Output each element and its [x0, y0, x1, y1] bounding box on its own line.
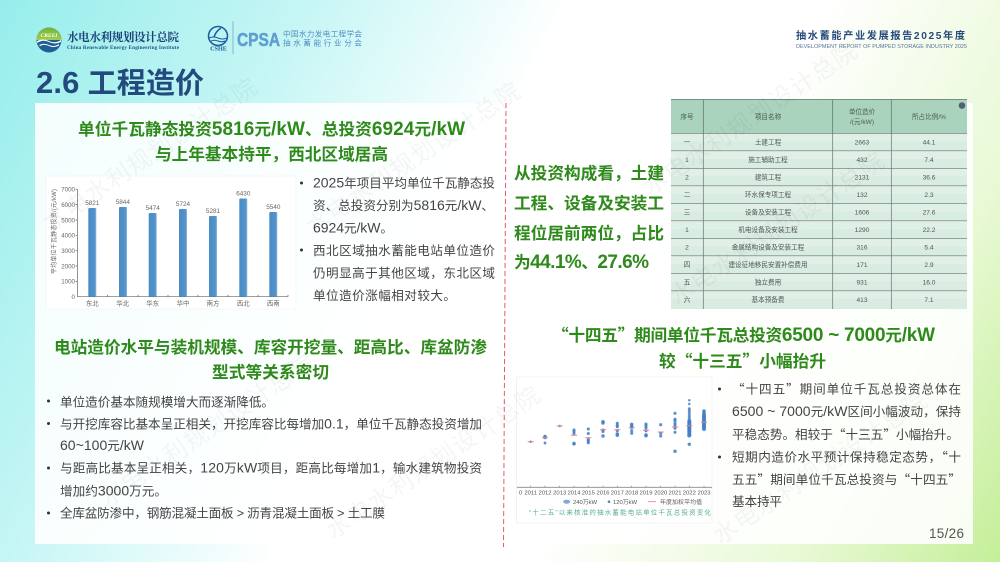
y axis: 7000 — [61, 186, 76, 194]
text block: cost factor bullets: 与距高比基本呈正相关，120万kW项目，距高比每增加1，输水建筑物投资 — [60, 460, 482, 476]
table rows: 2 — [685, 244, 689, 252]
text block: cost factor bullets: 60~100元/kW — [60, 437, 145, 453]
table rows: 机电设备及安装工程 — [738, 225, 798, 234]
table rows: 1606 — [855, 210, 870, 216]
y axis: 4000 — [61, 233, 76, 240]
text block: 14th five-year plan bullets: 基本持平 — [732, 495, 782, 509]
year labels: 2020 — [654, 490, 668, 496]
table rows: 432 — [856, 157, 868, 164]
weighted mean marks — [528, 422, 707, 442]
legend: 年度加权平均值 — [660, 498, 702, 506]
year labels: 2013 — [553, 490, 567, 496]
bar value labels: 5844 — [116, 199, 130, 206]
table rows: 独立费用 — [755, 278, 781, 286]
table rows: 一 — [684, 140, 691, 146]
watermarks: 水电水利规划设计总院 — [708, 387, 932, 550]
bar value labels: 5724 — [176, 201, 191, 208]
icon: CREEI emblem — [36, 27, 62, 52]
text block: cost factor bullets: 单位造价基本随规模增大而逐渐降低。 — [60, 394, 274, 410]
watermarks: 水电水利规划设计总院 — [38, 74, 262, 237]
y axis: 3000 — [61, 248, 76, 255]
table rows: 316 — [856, 244, 868, 252]
table rows: 金属结构设备及安装工程 — [732, 242, 805, 252]
bar value labels: 5281 — [206, 208, 221, 215]
table rows: 三 — [684, 208, 691, 216]
text block: regional cost bullets: 单位造价涨幅相对较大。 — [313, 289, 456, 303]
legend: 240万kW — [573, 499, 597, 506]
icon: CREEI emblem: CREEI — [41, 33, 58, 39]
table header text: 所占比例/% — [912, 112, 946, 121]
table rows: 1 — [685, 157, 689, 164]
report title English: DEVELOPMENT REPORT OF PUMPED STORAGE INDUSTRY 2025 — [796, 44, 967, 50]
y axis: 1000 — [61, 279, 76, 286]
heading: unit static investment: 与上年基本持平，西北区域居高 — [155, 144, 388, 164]
table rows: 7.4 — [924, 157, 934, 164]
table rows: 1 — [685, 227, 689, 234]
y axis: 5000 — [61, 217, 76, 224]
bar value labels: 5474 — [146, 205, 160, 212]
y axis: 0 — [72, 294, 76, 301]
text block: regional cost bullets: 西北区域抽水蓄能电站单位造价 — [313, 244, 495, 258]
table rows: 1290 — [855, 227, 870, 234]
callout: investment composition: 为44.1%、27.6% — [514, 252, 649, 273]
text block: regional cost bullets — [300, 174, 495, 303]
CPSA wordmark: CPSA — [237, 29, 280, 50]
table rows: 五 — [684, 278, 691, 286]
text block: regional cost bullets: 资、总投资分别为5816元/kW、 — [313, 197, 494, 213]
year labels: 2012 — [538, 490, 552, 496]
year labels: 2021 — [668, 490, 682, 496]
text block: regional cost bullets: 仍明显高于其他区域，东北区域 — [313, 266, 495, 280]
table header text — [680, 107, 946, 126]
table rows: 建设征地移民安置补偿费用 — [728, 260, 808, 269]
heading: 14th five-year plan investment: 较“十三五”小幅抬升 — [659, 348, 826, 372]
heading: unit static investment — [78, 119, 465, 164]
bar chart: regional unit cost — [46, 176, 296, 309]
page number: 15/26 — [929, 526, 964, 541]
bar value labels: 5540 — [266, 204, 281, 211]
bar value labels: 6430 — [236, 190, 251, 198]
text block: 14th five-year plan bullets — [718, 378, 961, 509]
y axis — [61, 186, 288, 301]
watermarks: 水电水利规划设计总院 — [95, 350, 319, 513]
table header text: /(元/kW) — [850, 118, 874, 126]
watermarks: 水电水利规划设计总院 — [301, 78, 525, 241]
category labels: 西南 — [267, 298, 280, 308]
callout: investment composition — [514, 163, 664, 273]
table: investment composition — [671, 99, 967, 309]
table rows: 四 — [684, 261, 690, 269]
category labels — [86, 298, 280, 308]
report title Chinese: 抽水蓄能产业发展报告2025年度 — [796, 29, 965, 42]
table rows: 设备及安装工程 — [745, 208, 791, 216]
callout: investment composition: 从投资构成看，土建 — [514, 163, 664, 183]
table rows: 2663 — [855, 140, 870, 146]
table rows: 基本预备费 — [752, 295, 785, 304]
year labels: 2016 — [596, 490, 610, 496]
heading: 14th five-year plan investment — [552, 322, 935, 372]
table rows: 施工辅助工程 — [748, 155, 788, 164]
text block: cost factor bullets: 全库盆防渗中，钢筋混凝土面板 > 沥青混凝土面板 > 土工膜 — [60, 506, 385, 520]
year labels: 2019 — [639, 490, 653, 496]
table header text: 项目名称 — [755, 112, 782, 121]
table rows: 22.2 — [923, 227, 936, 234]
year labels: 2018 — [625, 490, 639, 496]
text block: cost factor bullets: 与开挖库容比基本呈正相关，开挖库容比每增加0.1，单位千瓦静态投资增加 — [60, 416, 482, 432]
year labels: 2011 — [524, 490, 537, 496]
table rows: 六 — [684, 295, 691, 304]
bar value labels: 5821 — [85, 200, 100, 207]
text block: 14th five-year plan bullets: 6500 ~ 7000元/kW区间小幅波动，保持 — [732, 403, 961, 419]
logo name English: China Renewable Energy Engineering Institute — [67, 45, 180, 51]
text block: 14th five-year plan bullets: 平稳态势。相较于“十三五”小幅抬升。 — [732, 424, 959, 443]
watermarks: 水电水利规划设计总院 — [665, 148, 889, 311]
category labels: 南方 — [207, 298, 219, 308]
heading: 14th five-year plan investment: “十四五”期间单位千瓦总投资6500 ~ 7000元/kW — [552, 322, 935, 346]
year labels: 0 — [519, 490, 523, 496]
table rows: 2131 — [855, 174, 870, 182]
category labels: 西北 — [237, 300, 250, 308]
table rows: 27.6 — [923, 210, 936, 216]
scatter chart: total investment by year — [516, 377, 712, 523]
table rows: 二 — [684, 192, 691, 199]
category labels: 东北 — [86, 298, 99, 308]
table grid — [671, 100, 967, 309]
table rows: 5.4 — [924, 244, 934, 252]
text block: 14th five-year plan bullets: 五五”期间单位千瓦总投资与“十四五” — [732, 469, 961, 488]
table rows: 171 — [856, 262, 868, 269]
text block: 14th five-year plan bullets: “十四五”期间单位千瓦总投资总体在 — [732, 378, 961, 398]
category labels: 华东 — [146, 298, 159, 308]
heading: cost factors — [54, 337, 487, 382]
table header text: 单位造价 — [849, 107, 876, 116]
divider: red dashed line — [504, 103, 506, 547]
heading: cost factors: 型式等关系密切 — [212, 362, 329, 382]
year labels: 2017 — [611, 490, 624, 496]
table rows: 建筑工程 — [755, 172, 782, 182]
watermarks: 水电水利规划设计总院 — [638, 38, 862, 201]
icon: close button — [959, 102, 965, 109]
table rows: 2.3 — [924, 192, 934, 199]
heading: cost factors: 电站造价水平与装机规模、库容开挖量、距高比、库盆防渗 — [54, 337, 487, 357]
legend — [563, 498, 702, 506]
text block: 14th five-year plan bullets: 短期内造价水平预计保持稳定态势，“十 — [732, 446, 961, 466]
legend: 120万kW — [613, 499, 637, 506]
table header text: 序号 — [680, 112, 694, 121]
table rows — [684, 138, 936, 304]
logo: China Renewable Energy Engineering Institute — [36, 27, 180, 52]
chart caption: “十二五”以来核准的抽水蓄能电站单位千瓦总投资变化 — [529, 508, 712, 516]
report title top right — [796, 29, 967, 50]
text block: cost factor bullets: 增加约3000万元。 — [60, 482, 167, 498]
watermarks: 水电水利规划设计总院 — [321, 382, 545, 545]
society name line 2: 抽水蓄能行业分会 — [283, 38, 362, 48]
callout: investment composition: 工程、设备及安装工 — [514, 193, 664, 213]
y axis: 6000 — [61, 202, 76, 209]
page title: 2.6 工程造价 — [36, 65, 204, 100]
category labels: 华北 — [116, 298, 130, 308]
y axis title: 平均单位千瓦静态投资/(元/kW) — [50, 189, 58, 274]
table rows: 2.9 — [924, 262, 934, 269]
text block: regional cost bullets: 6924元/kW。 — [313, 220, 393, 236]
year labels — [519, 490, 711, 496]
text block: cost factor bullets — [47, 394, 482, 520]
icon: CSHE emblem — [208, 26, 228, 52]
table rows: 132 — [856, 192, 868, 199]
table rows: 16.0 — [923, 280, 936, 286]
table rows: 环水保专项工程 — [745, 190, 791, 199]
society name line 1: 中国水力发电工程学会 — [283, 28, 362, 38]
text block: regional cost bullets: 2025年项目平均单位千瓦静态投 — [313, 174, 495, 190]
bar value labels — [85, 190, 281, 215]
table rows: 44.1 — [923, 140, 936, 146]
table body — [671, 133, 967, 309]
logo: CSHE and CPSA — [208, 21, 362, 54]
white content panel — [35, 103, 973, 544]
table rows: 土建工程 — [755, 138, 782, 146]
year labels: 2022 — [683, 490, 696, 496]
year labels: 2023 — [697, 490, 711, 496]
y axis: 2000 — [61, 263, 76, 270]
table header — [671, 99, 967, 133]
table rows: 36.6 — [923, 174, 936, 182]
table rows: 2 — [685, 174, 689, 182]
heading: unit static investment: 单位千瓦静态投资5816元/kW、总投资6924元/kW — [78, 119, 465, 140]
logo name Chinese: 水电水利规划设计总院 — [67, 30, 180, 44]
year labels: 2015 — [582, 490, 596, 496]
x axis — [517, 486, 712, 487]
table rows: 7.1 — [924, 297, 934, 304]
table rows: 413 — [856, 297, 868, 304]
scatter points — [530, 399, 706, 453]
logo divider — [232, 21, 234, 54]
icon: CSHE emblem: CSHE — [210, 46, 227, 52]
callout: investment composition: 程位居前两位，占比 — [514, 223, 664, 243]
table rows: 931 — [856, 280, 868, 286]
year labels: 2014 — [567, 490, 581, 496]
category labels: 华中 — [177, 298, 189, 308]
bars — [88, 198, 277, 297]
